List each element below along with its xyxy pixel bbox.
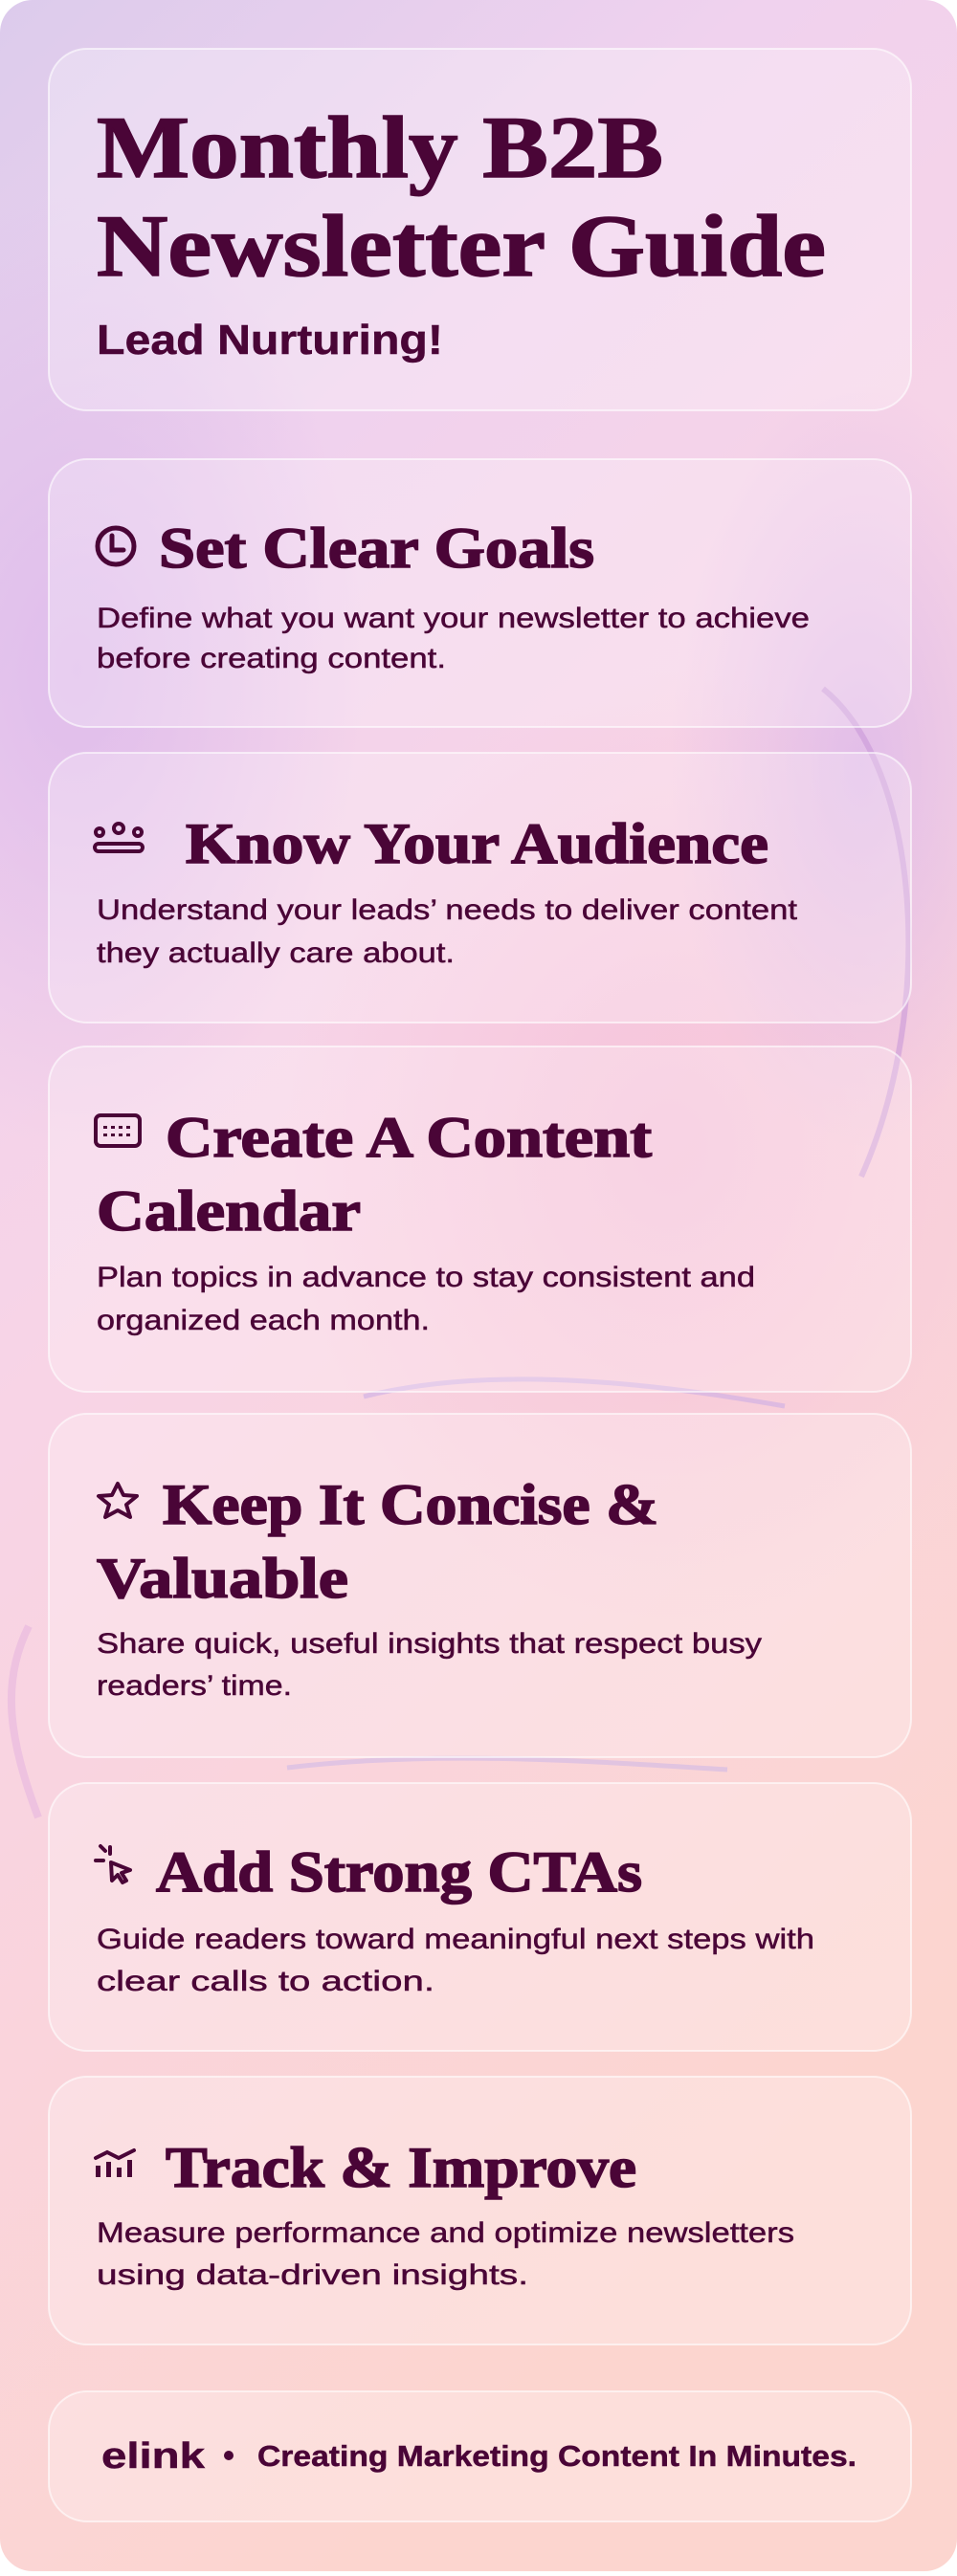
footer: elink: [101, 2436, 206, 2477]
card: know your audience: Understand your leads’ needs to deliver content: [97, 894, 798, 926]
card: know your audience: Know Your Audience: [186, 812, 768, 875]
card: concise & valuable: Valuable: [97, 1547, 348, 1610]
icon: cursor click: [96, 1846, 130, 1882]
icon: star: [99, 1484, 137, 1517]
card: set clear goals: before creating content.: [97, 643, 446, 674]
card: strong CTAs: clear calls to action.: [97, 1966, 434, 1997]
card: concise & valuable: Share quick, useful insights that respect busy: [97, 1628, 762, 1660]
card: set clear goals: [49, 459, 911, 727]
title card: Lead Nurturing!: [97, 317, 443, 363]
icon: calendar: [96, 1115, 140, 1146]
card: strong CTAs: Add Strong CTAs: [156, 1840, 642, 1904]
card: content calendar: [49, 1046, 911, 1392]
footer: [49, 2391, 911, 2521]
card: strong CTAs: Guide readers toward meaningful next steps with: [97, 1924, 814, 1955]
title card: [49, 49, 911, 410]
card: concise & valuable: [49, 1414, 911, 1757]
card: track & improve: [49, 2077, 911, 2345]
footer: Creating Marketing Content In Minutes.: [257, 2439, 857, 2473]
card: know your audience: [49, 753, 911, 1023]
title card: Monthly B2B: [97, 99, 663, 196]
card: content calendar: Create A Content: [166, 1106, 652, 1169]
card: track & improve: using data-driven insights.: [97, 2259, 528, 2291]
card: content calendar: Plan topics in advance to stay consistent and: [97, 1262, 755, 1293]
icon: people: [95, 824, 143, 851]
card: content calendar: Calendar: [97, 1179, 361, 1243]
card: strong CTAs: [49, 1783, 911, 2051]
title card: Newsletter Guide: [97, 197, 826, 295]
card: track & improve: Track & Improve: [166, 2136, 636, 2199]
card: know your audience: they actually care about.: [97, 937, 455, 969]
card: set clear goals: Define what you want your newsletter to achieve: [97, 603, 810, 634]
icon: clock: [98, 528, 134, 564]
card: set clear goals: Set Clear Goals: [159, 517, 594, 580]
card: concise & valuable: Keep It Concise &: [163, 1473, 658, 1536]
card: concise & valuable: readers’ time.: [97, 1670, 292, 1702]
card: track & improve: Measure performance and optimize newsletters: [97, 2217, 794, 2249]
card: content calendar: organized each month.: [97, 1305, 430, 1336]
icon: bar chart: [96, 2150, 134, 2177]
